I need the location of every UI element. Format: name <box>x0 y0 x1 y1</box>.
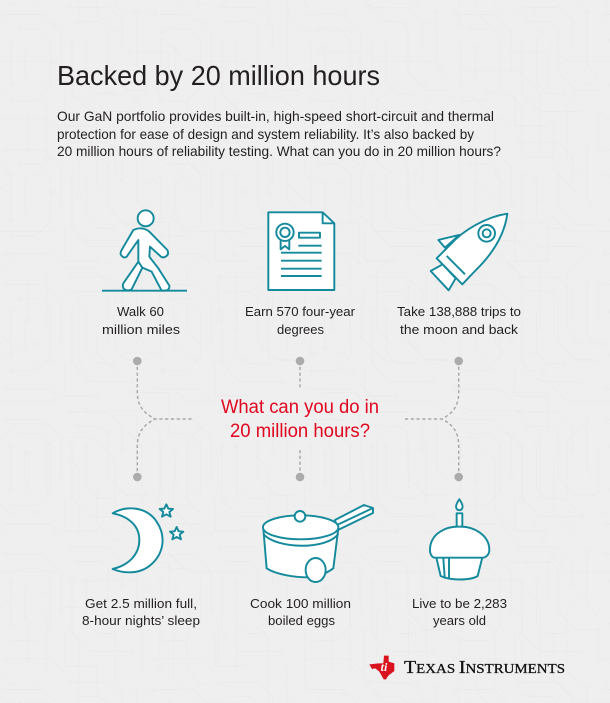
intro paragraph: 20 million hours of reliability testing. What can you do in 20 million hours? <box>57 144 501 159</box>
label: degrees: Earn 570 four-year <box>245 304 356 319</box>
label: sleep <box>82 596 200 628</box>
label: moon trips: Take 138,888 trips to <box>397 304 521 319</box>
icon: Texas state mark <box>369 656 394 679</box>
label: sleep: 8-hour nights’ sleep <box>82 613 200 628</box>
label: walk <box>102 304 181 337</box>
label: eggs: boiled eggs <box>268 613 336 628</box>
label: moon trips: the moon and back <box>400 322 519 337</box>
intro paragraph: protection for ease of design and system reliability. It’s also backed by <box>57 127 474 142</box>
icon: walking person <box>102 210 187 291</box>
label: walk: million miles <box>102 322 181 337</box>
label: walk: Walk 60 <box>117 304 164 319</box>
icon: birthday cupcake <box>430 499 489 579</box>
label: eggs <box>250 596 351 628</box>
label: degrees <box>245 304 356 337</box>
icon: pot with egg <box>263 505 373 582</box>
label: age <box>412 596 507 628</box>
label: sleep: Get 2.5 million full, <box>85 596 197 611</box>
label: moon trips <box>397 304 521 337</box>
intro paragraph <box>57 109 501 159</box>
central question: What can you do in <box>221 397 379 418</box>
central question: 20 million hours? <box>230 421 370 442</box>
icon: rocket <box>431 214 507 290</box>
label: degrees: degrees <box>277 322 324 337</box>
title: Backed by 20 million hours <box>57 60 380 91</box>
icon: Texas state mark: ti <box>381 660 388 674</box>
label: eggs: Cook 100 million <box>250 596 351 611</box>
label: age: Live to be 2,283 <box>412 596 507 611</box>
wordmark: TEXAS INSTRUMENTS <box>404 657 565 677</box>
dashed connectors <box>133 357 463 481</box>
intro paragraph: Our GaN portfolio provides built-in, high-speed short-circuit and thermal <box>57 109 494 124</box>
icon: moon and stars <box>113 504 183 572</box>
label: age: years old <box>433 613 486 628</box>
icon: diploma document <box>268 212 334 290</box>
central question <box>221 397 379 442</box>
